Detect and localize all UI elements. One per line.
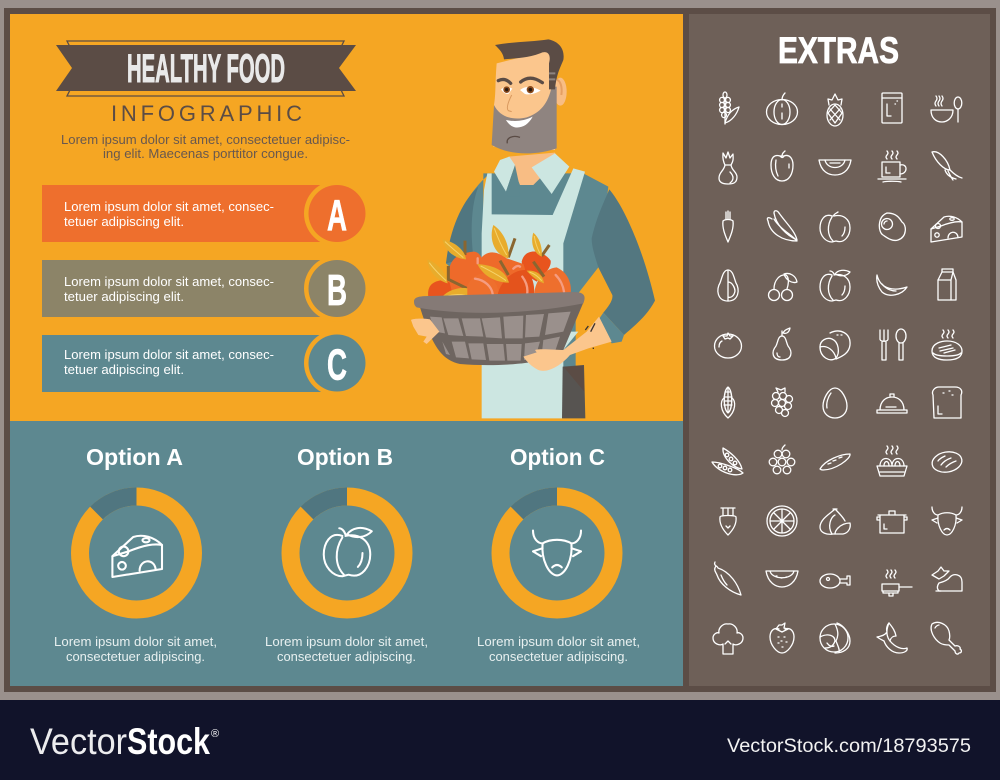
icon: avocado	[718, 270, 738, 301]
icon: mango	[820, 331, 850, 360]
icon: bread slice	[932, 387, 962, 418]
icon: cloche	[877, 394, 907, 413]
icon: chili pepper	[715, 562, 741, 595]
icon: cooking pot	[877, 511, 907, 533]
Option C heading: Option C	[510, 444, 605, 470]
icon: broccoli	[713, 624, 743, 654]
Option A heading: Option A	[86, 444, 183, 470]
icon: cheese	[112, 536, 162, 577]
icon: melon slice	[819, 160, 851, 175]
icon: apricot with leaf	[820, 270, 850, 301]
apples	[427, 225, 571, 300]
image id: VectorStock.com/18793575	[727, 736, 971, 757]
icon: watermelon slice	[766, 571, 798, 587]
option bar C	[42, 330, 370, 396]
option bar A: A	[327, 191, 347, 240]
basket	[414, 292, 585, 365]
icon grid	[712, 92, 964, 654]
donut chart C	[500, 496, 614, 610]
panel: orange hero	[10, 14, 683, 421]
icon: cherries	[768, 273, 797, 300]
icon: cheese	[931, 216, 962, 242]
intro text	[61, 133, 350, 161]
extras heading: EXTRAS	[778, 30, 899, 71]
icon: onion	[719, 152, 737, 184]
VectorStock logo: Vector	[30, 721, 127, 762]
icon: bread loaf	[930, 450, 964, 474]
option bar B: B	[327, 266, 347, 315]
illustration: farmer holding apple basket	[411, 39, 655, 418]
panel: extras	[689, 14, 990, 686]
VectorStock logo: Stock	[127, 721, 210, 762]
option bar B: tetuer adipiscing elit.	[64, 290, 184, 304]
Option B description: Lorem ipsum dolor sit amet,	[265, 635, 428, 649]
icon: bell pepper	[771, 151, 793, 181]
option bar B: Lorem ipsum dolor sit amet, consec-	[64, 275, 274, 289]
Option B description: consectetuer adipiscing.	[277, 650, 416, 664]
Option A description: Lorem ipsum dolor sit amet,	[54, 635, 217, 649]
icon: root vegetable	[932, 152, 962, 180]
icon: pasta bowl	[877, 446, 907, 476]
Option C description: consectetuer adipiscing.	[489, 650, 628, 664]
VectorStock logo: ®	[211, 728, 219, 740]
option bar A	[42, 180, 370, 246]
Option C description: Lorem ipsum dolor sit amet,	[477, 635, 640, 649]
icon: baguette	[820, 454, 850, 470]
icon: pea pods	[767, 211, 797, 241]
VectorStock logo	[30, 721, 219, 762]
icon: glass	[882, 93, 902, 123]
subtitle: INFOGRAPHIC	[111, 101, 302, 126]
option bar B	[42, 256, 370, 322]
icon: cow head	[932, 507, 962, 535]
title ribbon	[56, 41, 356, 96]
icon: grapes	[772, 388, 792, 416]
icon: carrot	[723, 211, 733, 242]
icon: strawberry	[770, 623, 794, 653]
icon: pear	[773, 328, 791, 360]
option bar C: C	[327, 340, 347, 390]
donut chart B	[290, 496, 404, 610]
icon: roast chicken	[932, 567, 962, 591]
option bar A: Lorem ipsum dolor sit amet, consec-	[64, 200, 274, 214]
Option B heading: Option B	[297, 444, 393, 470]
icon: cow	[533, 531, 581, 575]
icon: peach	[820, 212, 850, 242]
icon: chicken drumstick	[931, 622, 961, 654]
Option A description: consectetuer adipiscing.	[66, 650, 205, 664]
icon: fried egg	[879, 213, 905, 240]
icon: meat leg	[820, 574, 850, 588]
icon: banana	[877, 275, 907, 295]
option bar C: Lorem ipsum dolor sit amet, consec-	[64, 348, 274, 362]
icon: pumpkin	[766, 93, 798, 124]
icon: berries cluster	[769, 445, 795, 474]
intro text: ing elit. Maecenas porttitor congue.	[103, 147, 308, 161]
icon: milk carton	[938, 269, 956, 300]
donut chart A	[80, 496, 193, 610]
title ribbon: HEALTHY FOOD	[127, 47, 285, 91]
icon: fork and spoon	[880, 329, 906, 360]
icon: tomato	[714, 333, 742, 358]
Option C description	[477, 635, 640, 664]
icon: pineapple	[827, 94, 843, 126]
footer bar	[0, 700, 1000, 780]
Option A description	[54, 635, 217, 664]
icon: steak	[932, 330, 962, 360]
icon: cabbage	[820, 623, 850, 653]
icon: pea pods open	[712, 448, 743, 475]
icon: wheat	[720, 92, 739, 124]
icon: peach	[324, 528, 372, 576]
icon: peeled banana	[877, 623, 907, 653]
intro text: Lorem ipsum dolor sit amet, consectetuer adipisc-	[61, 133, 350, 147]
icon: corn	[721, 387, 735, 418]
icon: citrus slice	[767, 506, 797, 536]
icon: garlic	[820, 509, 850, 534]
icon: egg	[823, 388, 847, 418]
face	[492, 39, 567, 153]
option bar A: tetuer adipiscing elit.	[64, 215, 184, 229]
icon: radish	[720, 508, 736, 535]
panel: teal options	[10, 421, 683, 686]
icon: coffee cup	[878, 151, 906, 182]
icon: frying pan	[882, 570, 912, 596]
hands	[411, 317, 612, 371]
Option B description	[265, 635, 428, 664]
option bar C: tetuer adipiscing elit.	[64, 363, 184, 377]
icon: bowl and spoon	[931, 96, 962, 122]
